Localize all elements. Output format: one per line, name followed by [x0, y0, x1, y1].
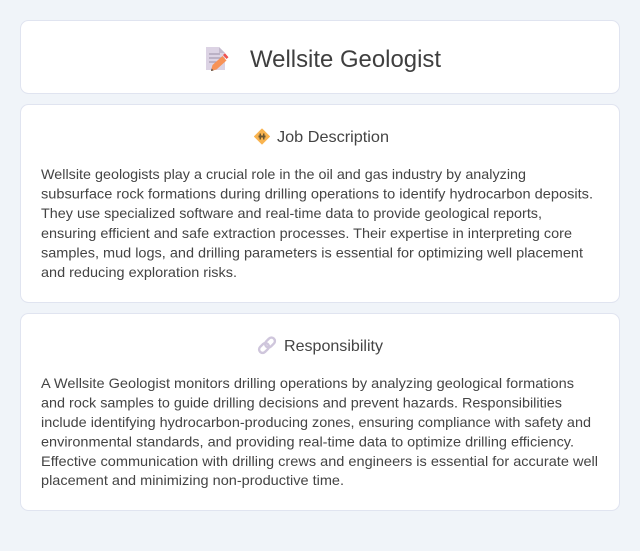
- icon: chain link: [258, 336, 276, 354]
- icon: document with pencil: [206, 47, 228, 71]
- heading: job description: Job Description: [277, 129, 389, 146]
- text block: responsibility: A Wellsite Geologist monitors drilling operations by analyzing geological formations: [41, 375, 574, 391]
- text block: job description: and reducing exploration risks.: [41, 264, 237, 280]
- panel: job description: [20, 104, 620, 302]
- panel: responsibility: [20, 314, 620, 510]
- text block: job description: ensuring efficient and safe extraction processes. Their expertise in interpreting core: [41, 225, 572, 241]
- title: Wellsite Geologist: [250, 46, 441, 73]
- text block: responsibility: include identifying hydrocarbon-producing zones, ensuring compliance with safety and: [41, 414, 591, 430]
- panel: title card: [20, 20, 620, 94]
- text block: job description: Wellsite geologists play a crucial role in the oil and gas industry by analyzing: [41, 166, 526, 182]
- text block: responsibility: placement and minimizing non-productive time.: [41, 472, 344, 488]
- text block: job description: subsurface rock formations during drilling operations to identify hydrocarbon deposits.: [41, 186, 593, 202]
- text block: responsibility: [41, 375, 598, 488]
- text block: responsibility: Effective communication with drilling crews and engineers is essential for accurate well: [41, 453, 598, 469]
- text block: responsibility: and rock samples to guide drilling decisions and prevent hazards. Responsibilities: [41, 394, 562, 410]
- text block: job description: They use specialized software and real-time data to provide geological reports,: [41, 205, 542, 221]
- text block: job description: [41, 166, 593, 280]
- icon: diamond road sign: [254, 129, 270, 144]
- text block: responsibility: environmental standards, and providing real-time data to optimize drilling efficiency.: [41, 433, 574, 449]
- heading: responsibility: Responsibility: [284, 338, 383, 355]
- text block: job description: samples, mud logs, and drilling parameters is essential for optimizing well placement: [41, 244, 583, 260]
